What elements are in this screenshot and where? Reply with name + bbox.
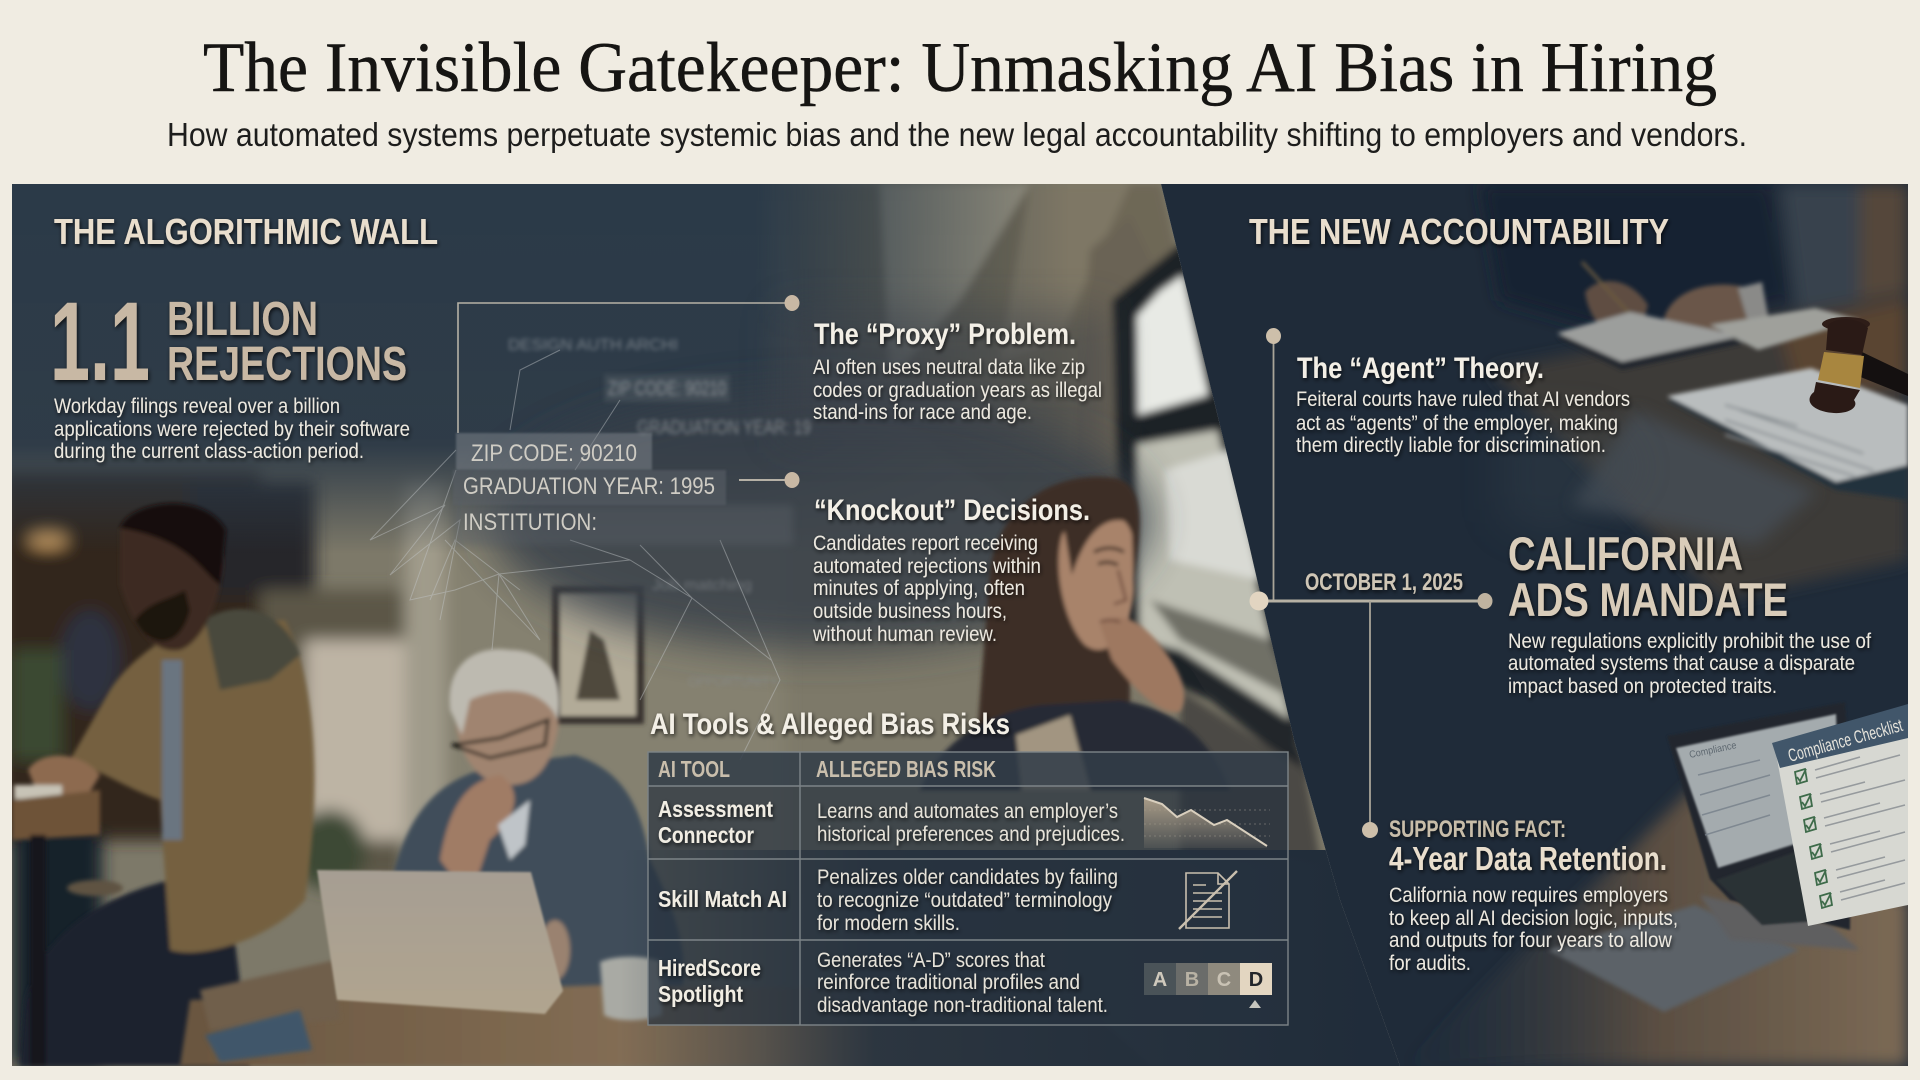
older man with laptop bbox=[392, 649, 684, 1000]
text block: california ads mandate: automated systems that cause a disparate bbox=[1508, 652, 1855, 675]
coffee mug bbox=[600, 957, 662, 1020]
text block: supporting fact: for audits. bbox=[1389, 952, 1471, 975]
row: assessment connector: Assessment bbox=[658, 796, 773, 822]
row: skill match ai: for modern skills. bbox=[817, 912, 960, 935]
text block: supporting fact bbox=[1389, 816, 1678, 975]
row: hiredscore spotlight bbox=[658, 949, 1272, 1017]
chart: declining area bbox=[1144, 798, 1270, 848]
text block: california ads mandate: CALIFORNIA bbox=[1508, 527, 1743, 580]
text block: agent theory: act as “agents” of the employer, making bbox=[1296, 412, 1618, 435]
table header row: ALLEGED BIAS RISK bbox=[816, 756, 996, 782]
heading: the algorithmic wall: THE ALGORITHMIC WALL bbox=[54, 211, 438, 252]
title: The Invisible Gatekeeper: Unmasking AI Bias in Hiring bbox=[203, 29, 1717, 107]
table frame bbox=[648, 752, 1288, 1025]
stat description: during the current class-action period. bbox=[54, 440, 364, 463]
text block: agent theory: them directly liable for discrimination. bbox=[1296, 434, 1606, 457]
text block: knockout decisions: Candidates report receiving bbox=[813, 532, 1038, 555]
icon: gavel bbox=[1810, 317, 1908, 413]
checklist items bbox=[1795, 769, 1832, 908]
blurred candidate data bbox=[508, 337, 811, 689]
text block: supporting fact: and outputs for four years to allow bbox=[1389, 929, 1673, 952]
connector to proxy problem bbox=[458, 295, 800, 433]
row: hiredscore spotlight: disadvantage non-traditional talent. bbox=[817, 994, 1108, 1017]
lower fade into dark bbox=[620, 850, 1420, 1066]
scale: a to d grades: C bbox=[1217, 969, 1231, 991]
row: skill match ai: to recognize “outdated” terminology bbox=[817, 889, 1112, 912]
blurred candidate data: ZIP CODE: 90210 bbox=[608, 378, 726, 400]
text block: proxy problem: stand-ins for race and age. bbox=[813, 401, 1032, 424]
cafe table bbox=[178, 982, 752, 1066]
compliance checklist sheet bbox=[1772, 704, 1908, 926]
panel: the algorithmic wall bbox=[50, 211, 1102, 646]
text block: agent theory: Feiteral courts have ruled that AI vendors bbox=[1296, 388, 1630, 411]
scale: a to d grades: D bbox=[1249, 969, 1263, 991]
panel: ai tools table bbox=[648, 708, 1288, 1025]
text block: knockout decisions: minutes of applying, often bbox=[813, 577, 1025, 600]
photo scene: left job seekers and train interior bbox=[0, 184, 1420, 1066]
subtitle: How automated systems perpetuate systemic bias and the new legal accountability shifting to employers and vendors. bbox=[167, 116, 1747, 153]
text block: california ads mandate bbox=[1508, 527, 1871, 698]
train interior bbox=[884, 184, 1322, 850]
row: hiredscore spotlight: HiredScore bbox=[658, 955, 761, 981]
row: assessment connector bbox=[658, 796, 1270, 848]
dark accountability backdrop bbox=[1161, 184, 1908, 1066]
table heading: AI Tools & Alleged Bias Risks bbox=[650, 708, 1010, 741]
stat: 1.1 billion rejections bbox=[50, 279, 407, 404]
stat: 1.1 billion rejections: BILLION bbox=[167, 293, 318, 346]
neural network lines bbox=[370, 350, 780, 760]
row: skill match ai: Penalizes older candidates by failing bbox=[817, 866, 1118, 889]
candidate data fields: ZIP CODE: 90210 bbox=[471, 440, 637, 467]
text block: knockout decisions: “Knockout” Decisions. bbox=[814, 494, 1090, 527]
text block: proxy problem: The “Proxy” Problem. bbox=[814, 318, 1076, 351]
younger man at cafe table bbox=[12, 503, 315, 1066]
framed picture bbox=[552, 586, 644, 724]
row: assessment connector: historical preferences and prejudices. bbox=[817, 823, 1125, 846]
text block: proxy problem: codes or graduation years as illegal bbox=[813, 379, 1102, 402]
date label: OCTOBER 1, 2025 bbox=[1305, 569, 1463, 596]
scale: a to d grades bbox=[1144, 963, 1272, 1008]
heading: the new accountability: THE NEW ACCOUNTABILITY bbox=[1249, 211, 1669, 252]
row: hiredscore spotlight: reinforce traditional profiles and bbox=[817, 971, 1080, 994]
table header row bbox=[658, 756, 996, 782]
cafe background bbox=[0, 470, 785, 1066]
row: assessment connector: Learns and automates an employer’s bbox=[817, 800, 1118, 823]
candidate data fields bbox=[453, 433, 793, 545]
row: hiredscore spotlight: Spotlight bbox=[658, 981, 743, 1007]
candidate data fields: INSTITUTION: bbox=[463, 509, 597, 536]
stat description: Workday filings reveal over a billion bbox=[54, 395, 340, 418]
row: skill match ai bbox=[658, 866, 1237, 935]
laptop screen label: Compliance bbox=[1688, 740, 1738, 761]
panel: the new accountability bbox=[1249, 211, 1871, 975]
top-left dark wash bbox=[12, 184, 1038, 546]
scale: a to d grades: B bbox=[1185, 969, 1199, 991]
text block: knockout decisions: without human review. bbox=[812, 623, 997, 646]
blurred candidate data: DESIGN AUTH ARCHI bbox=[508, 337, 678, 354]
text block: agent theory bbox=[1296, 352, 1630, 457]
text block: supporting fact: California now requires employers bbox=[1389, 884, 1668, 907]
text block: supporting fact: 4-Year Data Retention. bbox=[1389, 840, 1667, 877]
timeline bbox=[1250, 328, 1492, 838]
text block: supporting fact: to keep all AI decision logic, inputs, bbox=[1389, 907, 1678, 930]
blurred candidate data: Job matching bbox=[652, 577, 752, 594]
blurred candidate data: OPPORTUNITY bbox=[688, 673, 779, 689]
laptop bbox=[317, 870, 563, 1014]
text block: knockout decisions bbox=[812, 494, 1090, 646]
text block: california ads mandate: New regulations explicitly prohibit the use of bbox=[1508, 630, 1871, 653]
stat: 1.1 billion rejections: 1.1 bbox=[50, 279, 150, 404]
text block: knockout decisions: outside business hours, bbox=[813, 600, 1007, 623]
connector to knockout decisions bbox=[739, 472, 800, 488]
woman at the train window bbox=[920, 477, 1230, 790]
text block: california ads mandate: impact based on protected traits. bbox=[1508, 675, 1777, 698]
laptop screen lines bbox=[1698, 760, 1770, 835]
photo scene: courtroom signing and gavel bbox=[1480, 184, 1908, 600]
candidate data fields: GRADUATION YEAR: 1995 bbox=[463, 473, 715, 500]
stat description bbox=[54, 395, 410, 463]
stat description: applications were rejected by their software bbox=[54, 418, 410, 441]
text block: california ads mandate: ADS MANDATE bbox=[1508, 573, 1788, 626]
text block: proxy problem bbox=[813, 318, 1102, 424]
text block: supporting fact: SUPPORTING FACT: bbox=[1389, 816, 1566, 843]
row: hiredscore spotlight: Generates “A-D” scores that bbox=[817, 949, 1045, 972]
table header row: AI TOOL bbox=[658, 756, 730, 782]
row: assessment connector: Connector bbox=[658, 822, 754, 848]
stat: 1.1 billion rejections: REJECTIONS bbox=[167, 338, 407, 391]
scale: a to d grades: A bbox=[1153, 969, 1167, 991]
text block: knockout decisions: automated rejections within bbox=[813, 555, 1041, 578]
blurred candidate data: GRADUATION YEAR: 19 bbox=[637, 417, 811, 439]
text block: agent theory: The “Agent” Theory. bbox=[1297, 352, 1544, 385]
text block: proxy problem: AI often uses neutral data like zip bbox=[813, 356, 1085, 379]
row: skill match ai: Skill Match AI bbox=[658, 886, 787, 912]
icon: crossed-out document bbox=[1179, 871, 1237, 929]
photo scene: compliance laptop and papers bbox=[1486, 703, 1908, 1066]
